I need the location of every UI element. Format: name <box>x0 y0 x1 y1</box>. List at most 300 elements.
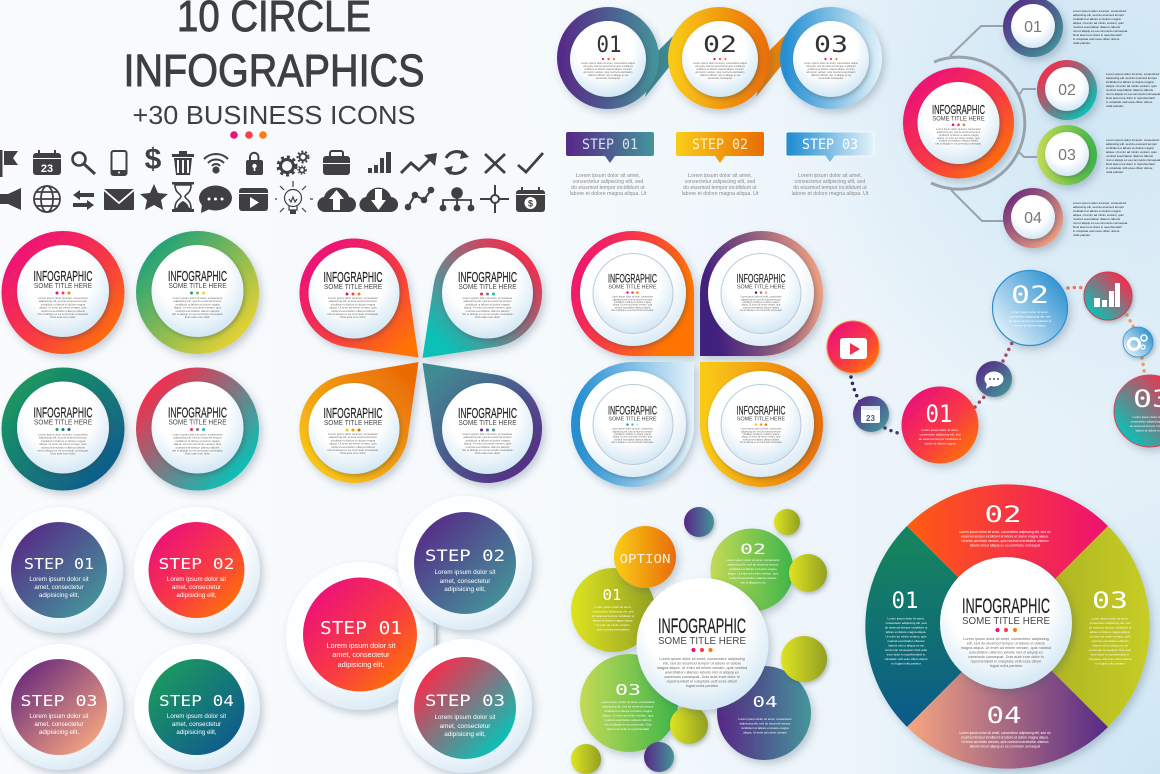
icon: flag <box>0 150 18 177</box>
ring: green yellow: aliqua. Ut enim ad minim veniam, quis <box>174 306 222 310</box>
title line two: INFOGRAPHICS <box>124 45 424 96</box>
node: chat <box>976 361 1012 397</box>
badge: step 04: adipisicing elit, <box>176 729 217 736</box>
corner circle: purple peach: aliqua. Ut enim ad minim veniam, quis <box>741 304 781 307</box>
badge: step 02 linked <box>398 496 532 630</box>
corner circle: purple peach: Lorem ipsum dolor sit amet, consectetur <box>740 296 782 299</box>
bubble: 03: Lorem ipsum dolor sit amet, consectetur <box>601 700 655 704</box>
icon: wifi <box>204 154 228 174</box>
hub centre: nisi ut aliquip ex ea commodo consequat. <box>935 143 982 146</box>
badge: step 01 large: amet, consectetur <box>332 650 390 659</box>
ring 03: ad minim veniam, quis nostrud exercitation <box>806 70 856 74</box>
satellite 03 <box>1037 125 1160 185</box>
segment: right 03: Lorem ipsum dolor sit amet, <box>1091 616 1129 620</box>
ring 03: commodo consequat. <box>819 76 844 80</box>
icon: cloud download <box>359 188 398 212</box>
segment: right 03: laboris nisi ut aliquip ex ea <box>1092 644 1128 648</box>
bubble: 03: aute irure dolor in reprehenderit <box>607 727 649 731</box>
satellite 03: adipiscing elit, sed do eiusmod tempor <box>1106 142 1157 146</box>
badge: step 01: Lorem ipsum dolor sit <box>29 576 89 583</box>
bubble: 03: aliqua. Ut enim ad minim veniam, quis <box>603 714 654 718</box>
icon set <box>0 143 545 214</box>
badge: step 01: adipisicing elit, <box>39 592 79 599</box>
ring: green yellow: INFOGRAPHIC <box>168 269 227 285</box>
badge: step 01 large: adipisicing elit, <box>338 660 384 669</box>
badge: step 02 linked: adipisicing elit, <box>444 586 486 593</box>
node: step 01: Lorem ipsum dolor sit amet, <box>921 428 959 432</box>
corner circle: pink orange: nisi ut aliquip ex ea commodo consequat. <box>611 309 654 312</box>
segment: left 01: do eiusmod tempor incididunt ut <box>885 626 927 630</box>
icon: cloud upload <box>317 188 356 212</box>
bubble: 01 <box>571 568 655 652</box>
panel: four petal teardrops <box>299 238 542 483</box>
node: step 02: do eiusmod tempor incididunt ut <box>1009 319 1051 323</box>
segment: right 03: do eiusmod tempor incididunt ut <box>1089 626 1131 630</box>
corner circle: pink orange <box>571 231 694 356</box>
icon: org chart <box>440 187 474 211</box>
corner circle: pink orange: nostrud exercitation ullamco laboris <box>614 306 651 309</box>
satellite 04 <box>1003 188 1128 248</box>
icon: megaphone <box>0 188 21 210</box>
corner circle: blue white: adipisicing elit, sed do eiusmod tempor <box>613 430 653 433</box>
segment: right 03: Ut enim ad minim veniam, quis <box>1089 634 1131 638</box>
icon: speech bubble <box>199 186 232 213</box>
step tag 02: Lorem ipsum dolor sit amet, <box>688 173 752 179</box>
satellite 01 <box>1003 0 1128 57</box>
ring: green blue: Duis aute irure dolor <box>50 452 76 456</box>
notch between badges <box>420 620 436 660</box>
petal: red teal <box>422 238 542 358</box>
satellite 03: in voluptate velit esse cillum dolore <box>1106 166 1153 170</box>
bubble: 01: Lorem ipsum dolor sit amet, <box>594 605 632 609</box>
panel: dotted path network <box>827 270 1160 464</box>
badge: step 03: amet, consectetur <box>34 721 84 728</box>
ring 01: ullamco laboris nisi ut aliquip ex ea <box>588 73 629 77</box>
node: calendar: 23 <box>866 414 875 423</box>
connector lines <box>931 26 1037 221</box>
step tag 02 <box>676 132 764 197</box>
petal: pink orange: nisi ut aliquip ex ea commodo consequat. <box>327 312 379 316</box>
icon: calendar <box>33 150 61 175</box>
corner circle: yellow orange: aliqua. Ut enim ad minim veniam, quis <box>741 436 781 439</box>
icon: light bulb <box>275 181 313 214</box>
ring 02: ad minim veniam, quis nostrud exercitation <box>695 70 745 74</box>
corner circle: pink orange: adipisicing elit, sed do eiusmod tempor <box>613 298 653 301</box>
bubble: 01: 01 <box>602 586 622 604</box>
ring 03 <box>780 7 882 109</box>
bubble: 04 <box>717 666 811 760</box>
ring: green blue: adipisicing elit, sed do eiusmod tempor <box>39 436 87 440</box>
satellite 02: adipiscing elit, sed do eiusmod tempor <box>1106 76 1157 80</box>
subtitle: +30 BUSINESS ICONS <box>132 100 416 130</box>
petal: yellow orange: SOME TITLE HERE <box>324 420 382 427</box>
step tag 02: do eiusmod tempor incididunt ut <box>683 185 757 191</box>
panel: three linked rings <box>557 7 882 197</box>
petal: yellow orange: adipisicing elit, sed do eiusmod tempor <box>329 435 377 439</box>
ring: red teal: aliqua. Ut enim ad minim veniam, quis <box>174 442 222 446</box>
ring: green yellow: nostrud exercitation ullamco laboris <box>176 309 220 313</box>
satellite 01: Lorem ipsum dolor sit amet, consectetur <box>1073 9 1126 13</box>
bubble: central title <box>636 578 768 710</box>
corner circle: yellow orange: SOME TITLE HERE <box>737 417 785 423</box>
ring 01: ad minim veniam, quis nostrud exercitation <box>583 70 633 74</box>
bubble: 03: nostrud exercitation ullamco laboris <box>604 718 652 722</box>
ring: pink orange: INFOGRAPHIC <box>34 269 92 285</box>
segment: right 03: commodo consequat. Duis aute <box>1089 648 1131 652</box>
corner circle: blue white: incididunt ut labore et dolore magna <box>614 433 652 436</box>
panel: four segment wheel <box>865 484 1150 769</box>
ring: green yellow: nisi ut aliquip ex ea commodo consequat. <box>172 312 223 316</box>
segment: top 02: laboris nisi ut aliquip ex ea commodo consequat <box>970 544 1040 548</box>
ring 02: commodo consequat. <box>708 76 733 80</box>
petal: yellow orange <box>299 362 418 483</box>
ring: green blue: Lorem ipsum dolor sit amet, consectetur <box>38 432 88 436</box>
corner circle: purple peach: incididunt ut labore et dolore magna <box>743 301 780 304</box>
corner circle: pink orange: incididunt ut labore et dolore magna <box>614 301 652 304</box>
link: orange connector <box>756 33 795 97</box>
segment: top 02: 02 <box>984 503 1022 528</box>
segment: top 02 <box>907 484 1108 626</box>
ring: pink orange: nisi ut aliquip ex ea commodo consequat. <box>37 312 89 316</box>
icon: dollar: $ <box>145 143 162 176</box>
badge: step 02: STEP 02 <box>158 555 234 573</box>
bubble: central title: SOME TITLE HERE <box>658 635 746 647</box>
corner circle: purple peach: nisi ut aliquip ex ea commodo consequat. <box>740 309 783 312</box>
ring: green blue: nostrud exercitation ullamco laboris <box>41 445 86 449</box>
segment: bottom 04: Lorem ipsum dolor sit amet, consectetur adipiscing elit, sed do <box>959 731 1051 735</box>
bubble: 02: nostrud exercitation ullamco laboris <box>729 576 777 580</box>
petal: red teal: INFOGRAPHIC <box>458 270 517 286</box>
satellite 02: Lorem ipsum dolor sit amet, consectetur <box>1106 72 1159 76</box>
ring 02: icing elit, sed do eiusmod tempor incididunt <box>695 64 745 68</box>
step tag 01: consectetur adipiscing elit, sed <box>573 179 643 185</box>
segment: bottom 04: Ut enim ad minim veniam, quis nostrud exercitation ullamco <box>961 740 1049 744</box>
icon: mail <box>104 189 134 210</box>
bubble: central title: Lorem ipsum dolor sit amet, consectetur adipiscing <box>659 657 745 661</box>
panel: three linked step badges <box>286 496 532 773</box>
petal: yellow orange: aliqua. Ut enim ad minim veniam, quis <box>329 442 377 446</box>
corner circle: purple peach: SOME TITLE HERE <box>737 285 785 291</box>
petal: pink orange: Duis aute irure dolor <box>340 315 366 319</box>
segment: left 01: voluptate velit esse cillum dolore <box>884 657 928 661</box>
corner circle: purple peach: INFOGRAPHIC <box>737 272 786 286</box>
ring: red teal: nisi ut aliquip ex ea commodo consequat. <box>172 448 223 452</box>
petal: yellow orange: incididunt ut labore et dolore magna <box>331 438 376 442</box>
segment: top 02: eiusmod tempor incididunt ut labore et dolore magna aliqua. <box>961 534 1049 538</box>
step tag 03: consectetur adipiscing elit, sed <box>795 179 865 185</box>
ring: pink orange: adipisicing elit, sed do eiusmod tempor <box>39 299 87 303</box>
icon: check <box>518 153 543 172</box>
corner circle: blue white: Lorem ipsum dolor sit amet, consectetur <box>612 428 653 431</box>
icon: calendar dollar: $ <box>528 198 533 208</box>
ring: pink orange: aliqua. Ut enim ad minim veniam, quis <box>39 306 87 310</box>
ring 01: ut labore et dolore magna aliqua. Ut enim <box>584 67 632 71</box>
bubble: small olive top <box>774 509 800 535</box>
node: gears <box>1123 327 1153 357</box>
corner circle: blue white <box>571 362 694 487</box>
satellite 04: in voluptate velit esse cillum dolore <box>1073 229 1120 233</box>
segment: right 03: consectetur adipiscing elit, sed <box>1090 621 1131 625</box>
petal: pink orange: Lorem ipsum dolor sit amet, consectetur <box>328 296 378 300</box>
corner circle: purple peach <box>700 231 823 356</box>
satellite 02: incididunt ut labore et dolore magna <box>1106 80 1154 84</box>
ring 01: commodo consequat. <box>596 76 621 80</box>
bubble: option: OPTION <box>620 552 670 566</box>
ring 03: ut labore et dolore magna aliqua. Ut enim <box>807 67 855 71</box>
icon: node line <box>405 187 434 210</box>
bubble: option <box>614 526 676 588</box>
satellite 01: Duis aute irure dolor in reprehenderit <box>1073 33 1122 37</box>
corner circle: purple peach: adipisicing elit, sed do eiusmod tempor <box>741 298 781 301</box>
ring: green yellow: SOME TITLE HERE <box>168 283 227 290</box>
hub ring <box>903 68 1014 178</box>
title block <box>124 0 424 139</box>
corner circle: pink orange: INFOGRAPHIC <box>608 272 657 286</box>
hub centre: INFOGRAPHIC <box>932 102 985 117</box>
icon: sync <box>444 150 469 175</box>
satellite 04: 04 <box>1024 210 1042 227</box>
step tag 03 <box>786 132 874 197</box>
icon: hourglass <box>172 182 194 212</box>
ring: red teal: SOME TITLE HERE <box>168 420 227 426</box>
icon: transfer arrows <box>73 190 94 210</box>
petal: teal purple <box>422 363 542 483</box>
segment: left 01: consectetur adipiscing elit, sed <box>886 621 927 625</box>
node: bar chart <box>1084 272 1132 320</box>
ring: green yellow: adipisicing elit, sed do eiusmod tempor <box>173 299 222 303</box>
corner circle: blue white: INFOGRAPHIC <box>608 404 657 418</box>
petal: red teal: nostrud exercitation ullamco laboris <box>466 309 510 313</box>
bubble: small purple top <box>684 507 714 537</box>
petal: teal purple: Lorem ipsum dolor sit amet, consectetur <box>463 432 512 436</box>
icon: phone <box>111 151 127 175</box>
hub centre <box>918 82 1000 164</box>
satellite 03: nisi ut aliquip ex ea commodo consequat. <box>1106 158 1160 162</box>
petal: yellow orange: Duis aute irure dolor <box>340 451 366 455</box>
badge: step 01: amet, consectetur <box>34 584 84 591</box>
satellite 01: nulla pariatur. <box>1073 41 1091 45</box>
segment: right 03: irure dolor in reprehenderit in <box>1091 652 1130 656</box>
step tag 01: STEP 01 <box>582 137 638 153</box>
ring 02: ut labore et dolore magna aliqua. Ut enim <box>696 67 744 71</box>
ring 01: 01 <box>596 33 622 58</box>
bubble: central title: exercitation ullamco laboris nisi ut aliquip ex <box>665 670 739 674</box>
bubble: 04: 04 <box>752 693 778 711</box>
hub centre: SOME TITLE HERE <box>932 115 985 122</box>
petal: yellow orange: nisi ut aliquip ex ea commodo consequat. <box>327 448 379 452</box>
node: step 02: 02 <box>1011 281 1049 309</box>
petal: red teal: Lorem ipsum dolor sit amet, consectetur <box>463 296 512 300</box>
node: step 02 <box>992 270 1068 346</box>
corner circle: pink orange: Lorem ipsum dolor sit amet, consectetur <box>612 296 653 299</box>
segment: right 03: 03 <box>1092 589 1128 614</box>
satellite 03: nulla pariatur. <box>1106 170 1124 174</box>
node: step 01: 01 <box>926 400 952 428</box>
satellite 03: 03 <box>1058 147 1076 164</box>
satellite 01: in voluptate velit esse cillum dolore <box>1073 37 1120 41</box>
node: step 02: Lorem ipsum dolor sit amet, <box>1011 310 1049 314</box>
ring: red teal: INFOGRAPHIC <box>168 406 227 422</box>
node: step 01 <box>902 386 978 464</box>
badge: step 02 <box>134 507 260 633</box>
corner circle: pink orange: aliqua. Ut enim ad minim veniam, quis <box>613 304 653 307</box>
ring: red teal: Duis aute irure dolor <box>185 452 210 456</box>
petal: pink orange: nostrud exercitation ullamco laboris <box>331 309 376 313</box>
segment: right 03: labore et dolore magna aliqua. <box>1090 630 1130 634</box>
satellite 04: aliqua. Ut enim ad minim veniam, quis <box>1073 213 1124 217</box>
badge: step 03: adipisicing elit, <box>39 729 79 736</box>
dotted connectors <box>851 288 1145 434</box>
icon: gears <box>278 152 308 175</box>
petal: pink orange <box>299 238 418 358</box>
ring 01 <box>557 7 659 109</box>
satellite 04: nulla pariatur. <box>1073 233 1091 237</box>
badge: step 02: adipisicing elit, <box>176 592 217 599</box>
step tag 02: STEP 02 <box>692 137 748 153</box>
bubble: small purple bottom <box>644 742 674 772</box>
panel: four plain ring circles <box>2 231 259 490</box>
satellite 04: Lorem ipsum dolor sit amet, consectetur <box>1073 201 1126 205</box>
badge: step 02: Lorem ipsum dolor sit <box>167 576 226 583</box>
satellite 04: nisi ut aliquip ex ea commodo consequat. <box>1073 221 1128 225</box>
segment: left 01: nostrud exercitation ullamco <box>887 639 925 643</box>
satellite 03: Duis aute irure dolor in reprehenderit <box>1106 162 1155 166</box>
bubble: 04: Lorem ipsum dolor sit amet, consectetur <box>738 717 792 721</box>
hub centre: Lorem ipsum dolor sit amet, consectetur <box>936 128 981 131</box>
petal: yellow orange: Lorem ipsum dolor sit amet, consectetur <box>328 432 378 436</box>
bubble: 02: adipiscing elit, sed do eiusmod tempor <box>727 562 779 566</box>
badge: step 04: amet, consectetur <box>172 721 221 728</box>
ring: green blue: SOME TITLE HERE <box>34 420 92 426</box>
corner circle: blue white: nostrud exercitation ullamco laboris <box>614 438 651 441</box>
icon: calendar: 23 <box>41 163 53 175</box>
wheel centre: commodo consequat. Duis aute irure dolor in <box>968 655 1044 659</box>
icon: globe <box>34 186 60 212</box>
ring 03: ullamco laboris nisi ut aliquip ex ea <box>811 73 852 77</box>
ring: green yellow: Lorem ipsum dolor sit amet, consectetur <box>173 296 222 300</box>
satellite 02 <box>1037 60 1160 120</box>
bubble: 03: 03 <box>615 681 641 699</box>
corner circle: blue white: nisi ut aliquip ex ea commodo consequat. <box>611 441 654 444</box>
ring: pink orange: Lorem ipsum dolor sit amet, consectetur <box>38 296 88 300</box>
segment: right 03: voluptate velit esse cillum dolore <box>1088 657 1132 661</box>
satellite 04: incididunt ut labore et dolore magna <box>1073 209 1121 213</box>
satellite 02: nostrud exercitation ullamco laboris <box>1106 88 1154 92</box>
wheel centre: magna aliqua. Ut enim ad minim veniam, quis nostrud <box>961 646 1051 650</box>
ring 02 <box>668 7 770 109</box>
icon: star <box>140 184 168 210</box>
bubble: 02: Lorem ipsum dolor sit amet, consectetur <box>726 558 780 562</box>
badge: step 03 linked: amet, consectetur <box>440 723 491 730</box>
ring: pink orange: incididunt ut labore et dolore magna <box>41 302 86 306</box>
petal: red teal: aliqua. Ut enim ad minim veniam, quis <box>464 306 512 310</box>
ring: red teal: incididunt ut labore et dolore magna <box>175 439 220 443</box>
ring: red teal: nostrud exercitation ullamco laboris <box>176 445 220 449</box>
step tag 03: STEP 03 <box>802 137 858 153</box>
node: step 01: do eiusmod tempor incididunt ut <box>919 437 961 441</box>
satellite 01: nisi ut aliquip ex ea commodo consequat. <box>1073 29 1128 33</box>
petal: teal purple: nisi ut aliquip ex ea commodo consequat. <box>462 448 513 452</box>
segment: left 01: 01 <box>892 589 918 614</box>
satellite 04: Duis aute irure dolor in reprehenderit <box>1073 225 1122 229</box>
corner circle: yellow orange: adipisicing elit, sed do eiusmod tempor <box>741 430 781 433</box>
satellite 02: nisi ut aliquip ex ea commodo consequat. <box>1106 92 1160 96</box>
ring 02: Lorem ipsum dolor sit amet, consectetur adipis <box>693 61 748 65</box>
segment: left 01: commodo consequat. Duis aute <box>885 648 927 652</box>
icon: briefcase <box>323 151 350 175</box>
ring: pink orange: nostrud exercitation ullamco laboris <box>41 309 86 313</box>
satellite 01: aliqua. Ut enim ad minim veniam, quis <box>1073 21 1124 25</box>
wheel centre <box>940 557 1072 689</box>
bubble: central title: INFOGRAPHIC <box>658 615 746 638</box>
satellite 02: aliqua. Ut enim ad minim veniam, quis <box>1106 84 1157 88</box>
bubble: 01: quis nostrud exercitation <box>597 628 630 632</box>
corner circle: pink orange: SOME TITLE HERE <box>608 285 657 291</box>
satellite 03: nostrud exercitation ullamco laboris <box>1106 154 1154 158</box>
icon: lock <box>246 153 263 175</box>
petal: red teal: SOME TITLE HERE <box>458 284 517 291</box>
segment: left 01: irure dolor in reprehenderit in <box>887 652 926 656</box>
step tag 01: do eiusmod tempor incididunt ut <box>571 185 645 191</box>
bubble: central title: elit, sed do eiusmod tempor ut labore et dolore <box>663 662 741 666</box>
link: teal connector <box>645 33 684 97</box>
bubble: 02 <box>710 528 794 612</box>
satellite 01: 01 <box>1024 19 1042 36</box>
bubble: central title: fugiat nulla pariatur <box>686 684 719 688</box>
badge: step 03 <box>0 644 123 770</box>
bubble: 01: labore et dolore magna aliqua. <box>593 618 633 622</box>
ring: green yellow: incididunt ut labore et dolore magna <box>175 302 220 306</box>
step tag 03: Lorem ipsum dolor sit amet, <box>798 173 862 179</box>
hub centre: nostrud exercitation ullamco laboris <box>939 140 979 143</box>
ring 03: 03 <box>814 33 848 58</box>
badge: step 03 linked: STEP 03 <box>425 691 505 710</box>
badge: step 04: STEP 04 <box>159 692 234 710</box>
panel: bubble cluster <box>571 507 827 774</box>
ring: red teal: Lorem ipsum dolor sit amet, consectetur <box>173 432 222 436</box>
satellite 02: nulla pariatur. <box>1106 104 1124 108</box>
petal: pink orange: INFOGRAPHIC <box>324 270 382 286</box>
ring 02: 02 <box>703 33 737 58</box>
panel: hub with four numbered satellites <box>903 0 1160 248</box>
wheel centre: exercitation ullamco laboris nisi ut aliquip ex <box>969 650 1043 654</box>
segment: left 01: labore et dolore magna aliqua. <box>886 630 926 634</box>
corner circle: yellow orange: INFOGRAPHIC <box>737 404 786 418</box>
badge: step 03: Lorem ipsum dolor sit <box>29 713 89 720</box>
bubble: 02: 02 <box>740 542 766 558</box>
satellite 04: nostrud exercitation ullamco laboris <box>1073 217 1121 221</box>
step tag 01: labore et dolore magna aliqua. Ut <box>570 191 647 197</box>
petal: red teal: incididunt ut labore et dolore magna <box>465 302 510 306</box>
ring: red teal: adipisicing elit, sed do eiusmod tempor <box>173 436 222 440</box>
icon: calendar dollar <box>516 187 545 212</box>
satellite 02: Duis aute irure dolor in reprehenderit <box>1106 96 1155 100</box>
panel: four square-cornered circles <box>571 231 823 487</box>
corner circle: purple peach: nostrud exercitation ullamco laboris <box>743 306 780 309</box>
bubble: 04: incididunt ut labore et dolore magna <box>741 726 789 730</box>
ring 02: ullamco laboris nisi ut aliquip ex ea <box>700 73 741 77</box>
wheel centre: reprehenderit in voluptate velit esse cillum <box>971 660 1041 664</box>
badge: step 03 linked: adipisicing elit, <box>444 731 486 738</box>
node: calendar <box>853 396 889 432</box>
segment: top 02: Ut enim ad minim veniam, quis nostrud exercitation ullamco <box>961 539 1049 543</box>
node: step 01: labore et dolore magna <box>925 442 956 446</box>
petal: pink orange: incididunt ut labore et dolore magna <box>331 302 376 306</box>
badge: step 01 large <box>286 562 434 710</box>
wheel shadow <box>866 484 1150 768</box>
corner circle: blue white: SOME TITLE HERE <box>608 417 657 423</box>
hub centre: aliqua. Ut enim ad minim veniam, quis <box>937 137 980 140</box>
